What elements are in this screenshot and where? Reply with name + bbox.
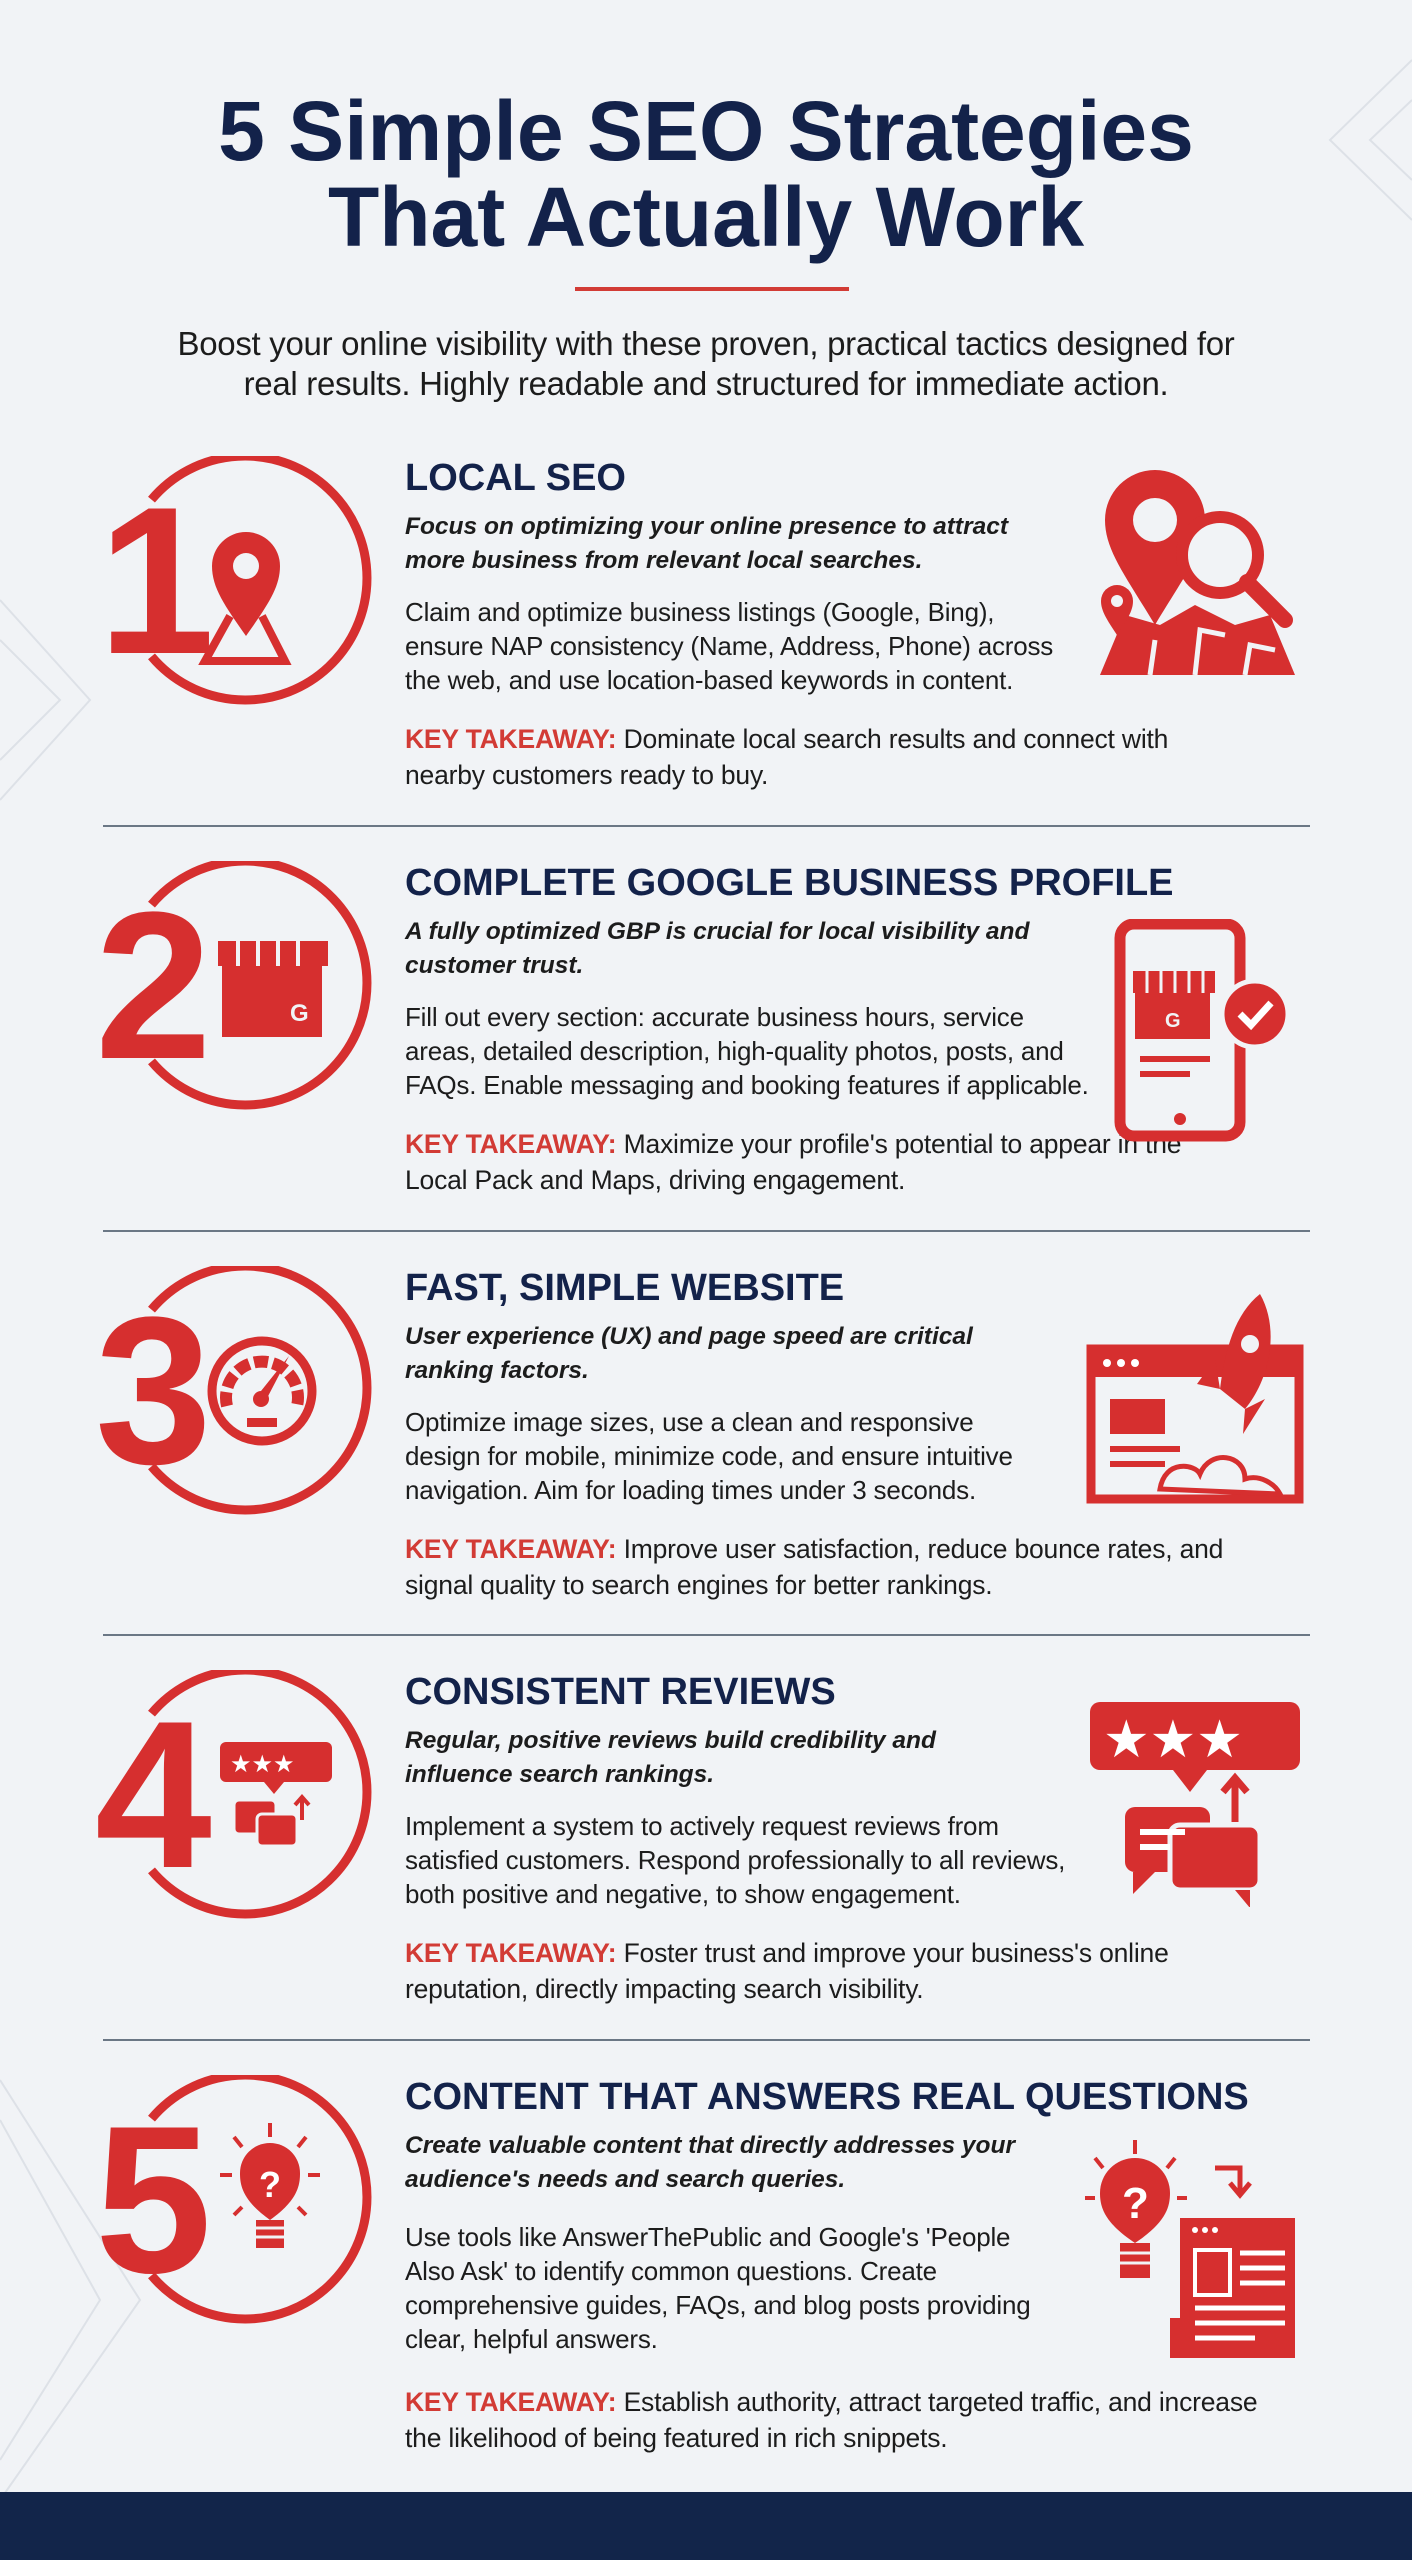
title: 5 Simple SEO Strategies [218,84,1194,178]
text block 2 [404,862,1181,1195]
number badge 3 [95,1266,372,1514]
text block 4: KEY TAKEAWAY: Foster trust and improve your business's online [405,1938,1169,1968]
title [218,84,1194,264]
subtitle: real results. Highly readable and structured for immediate action. [244,365,1168,402]
text block 1 [405,457,1168,790]
number badge 2: G [290,1000,309,1027]
text block 4 [405,1671,1169,2004]
text block 2: A fully optimized GBP is crucial for local visibility and [405,918,1029,945]
text block 5: Also Ask' to identify common questions. Create [405,2256,937,2286]
divider [103,1230,1310,1232]
text block 2: Fill out every section: accurate business hours, service [405,1002,1024,1032]
title underline [575,287,849,291]
text block 2: COMPLETE GOOGLE BUSINESS PROFILE [405,862,1174,904]
icon: browser with rocket [1086,1294,1304,1504]
icon: phone with store and check: G [1165,1010,1181,1032]
number badge 5: ? [259,2164,281,2205]
text block 5: audience's needs and search queries. [405,2166,845,2193]
text block 2: FAQs. Enable messaging and booking features if applicable. [405,1070,1089,1100]
divider [103,825,1310,827]
text block 4: Regular, positive reviews build credibility and [405,1727,936,1754]
text block 1: LOCAL SEO [405,457,626,499]
text block 1: the web, and use location-based keywords in content. [405,665,1013,695]
icon: lightbulb and article: ? [1122,2179,1149,2228]
text block 1: Focus on optimizing your online presence to attract [405,513,1008,540]
section 2: google business profile [95,861,1286,1195]
text block 3: KEY TAKEAWAY: Improve user satisfaction, reduce bounce rates, and [405,1534,1223,1564]
text block 4: satisfied customers. Respond professionally to all reviews, [405,1845,1065,1875]
text block 1: ensure NAP consistency (Name, Address, Phone) across [405,631,1053,661]
text block 5: CONTENT THAT ANSWERS REAL QUESTIONS [405,2076,1249,2118]
number badge 4: ★★★ [230,1750,295,1778]
text block 3: design for mobile, minimize code, and ensure intuitive [405,1441,1013,1471]
text block 1: more business from relevant local searches. [405,547,922,574]
icon: stars and chat bubbles: ★★★ [1103,1710,1243,1770]
text block 3: signal quality to search engines for better rankings. [405,1570,992,1600]
number badge 1 [98,456,372,704]
text block 4: both positive and negative, to show engagement. [405,1879,961,1909]
text block 3: ranking factors. [405,1357,589,1384]
text block 5: KEY TAKEAWAY: Establish authority, attract targeted traffic, and increase [405,2387,1257,2417]
icon: lightbulb and article [1085,2140,1295,2358]
section 1: local seo [98,456,1295,790]
text block 4: Implement a system to actively request reviews from [405,1811,999,1841]
text block 3: navigation. Aim for loading times under 3 seconds. [405,1475,976,1505]
text block 1: Claim and optimize business listings (Google, Bing), [405,597,994,627]
number badge 3: 3 [95,1273,212,1508]
title: That Actually Work [328,170,1084,264]
text block 5: Create valuable content that directly addresses your [405,2132,1015,2159]
text block 5: the likelihood of being featured in rich snippets. [405,2423,947,2453]
divider [103,1634,1310,1636]
text block 4: reputation, directly impacting search visibility. [405,1974,923,2004]
text block 2: areas, detailed description, high-quality photos, posts, and [405,1036,1064,1066]
text block 4: CONSISTENT REVIEWS [405,1671,836,1713]
text block 3: User experience (UX) and page speed are critical [405,1323,973,1350]
icon: phone with store and check [1114,919,1286,1142]
section 4: consistent reviews [95,1670,1300,2004]
number badge 2 [95,861,372,1110]
text block 5: comprehensive guides, FAQs, and blog posts providing [405,2290,1031,2320]
number badge 2: 2 [95,868,212,1103]
text block 3 [405,1267,1223,1600]
number badge 4: 4 [95,1677,212,1912]
text block 1: KEY TAKEAWAY: Dominate local search results and connect with [405,724,1168,754]
text block 4: influence search rankings. [405,1761,714,1788]
number badge 5: 5 [95,2082,212,2317]
divider [103,2039,1310,2041]
footer bar [0,2492,1412,2560]
subtitle: Boost your online visibility with these proven, practical tactics designed for [178,325,1234,362]
section 3: fast website [95,1266,1304,1600]
text block 5: Use tools like AnswerThePublic and Google's 'People [405,2222,1010,2252]
number badge 5 [95,2075,372,2324]
section 5: content that answers questions [95,2075,1295,2453]
subtitle [178,325,1234,402]
number badge 4 [95,1670,372,1918]
text block 3: Optimize image sizes, use a clean and responsive [405,1407,973,1437]
icon: map pin with magnifier [1100,470,1295,675]
text block 3: FAST, SIMPLE WEBSITE [405,1267,844,1309]
text block 2: customer trust. [405,952,583,979]
text block 2: Local Pack and Maps, driving engagement. [405,1165,905,1195]
text block 2: KEY TAKEAWAY: Maximize your profile's potential to appear in the [405,1129,1181,1159]
text block 1: nearby customers ready to buy. [405,760,768,790]
number badge 1: 1 [98,463,215,698]
icon: stars and chat bubbles [1090,1702,1300,1907]
text block 5 [405,2076,1257,2453]
text block 5: clear, helpful answers. [405,2324,658,2354]
